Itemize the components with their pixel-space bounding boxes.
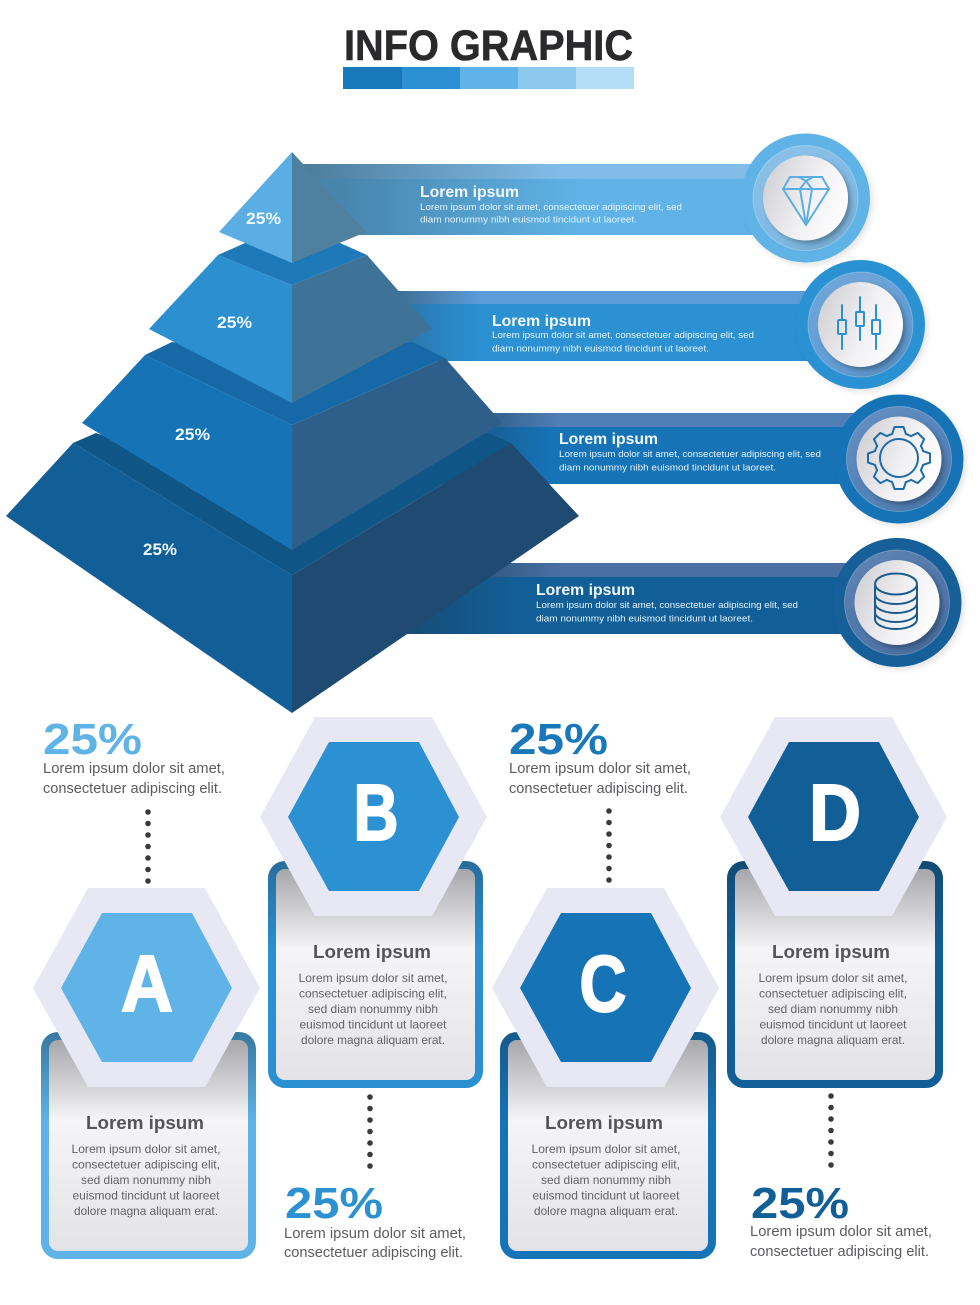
ribbon 2 text: Lorem ipsum dolor sit amet, consectetuer adipiscing elit, sed [492, 330, 754, 341]
dotted connector C [606, 808, 612, 883]
pyramid [6, 152, 579, 713]
icon: coin stack [875, 574, 917, 629]
stat A: consectetuer adipiscing elit. [43, 781, 222, 797]
stat C [509, 715, 691, 797]
ribbon 2 heading: Lorem ipsum [492, 313, 591, 330]
stat D: 25% [751, 1179, 849, 1228]
card D heading: Lorem ipsum [772, 941, 890, 962]
ribbon 4 text: diam nonummy nibh euismod tincidunt ut laoreet. [536, 614, 753, 624]
card B text: consectetuer adipiscing elit, [299, 986, 447, 1000]
card C text: Lorem ipsum dolor sit amet, [532, 1142, 680, 1156]
dotted connector D [828, 1093, 834, 1168]
card C heading: Lorem ipsum [545, 1112, 663, 1133]
card D text: sed diam nonummy nibh [768, 1002, 898, 1016]
icon badge: diamond [741, 134, 870, 262]
stat B [284, 1179, 466, 1261]
card B text [298, 971, 448, 1047]
ribbon 3 text [559, 449, 821, 474]
card B text: Lorem ipsum dolor sit amet, [298, 971, 448, 985]
ribbon 3 text: Lorem ipsum dolor sit amet, consectetuer adipiscing elit, sed [559, 449, 821, 460]
card D text: consectetuer adipiscing elit, [759, 986, 907, 1000]
card B heading: Lorem ipsum [313, 941, 431, 962]
ribbon 3 text: diam nonummy nibh euismod tincidunt ut laoreet. [559, 462, 776, 474]
ribbon 4 text [536, 600, 798, 624]
hexagon A: A [121, 939, 173, 1028]
card D [727, 861, 943, 1088]
stat B: consectetuer adipiscing elit. [284, 1245, 463, 1261]
ribbon 2 text [492, 330, 754, 354]
stat D: consectetuer adipiscing elit. [750, 1244, 929, 1260]
ribbon 4 heading: Lorem ipsum [536, 582, 635, 599]
card B text: dolore magna aliquam erat. [301, 1033, 445, 1047]
hexagon B: B [354, 768, 398, 857]
card A text: consectetuer adipiscing elit, [72, 1158, 220, 1172]
card D text: euismod tincidunt ut laoreet [760, 1018, 907, 1032]
card A text: sed diam nonummy nibh [81, 1173, 211, 1187]
card D text: dolore magna aliquam erat. [761, 1033, 905, 1047]
hexagon A [33, 888, 260, 1087]
card A [41, 1032, 256, 1259]
stat B: 25% [285, 1179, 383, 1228]
ribbon 3 [440, 413, 870, 484]
card C text [532, 1142, 680, 1218]
card C text: consectetuer adipiscing elit, [532, 1158, 680, 1172]
card B [268, 861, 483, 1088]
card A text: Lorem ipsum dolor sit amet, [72, 1142, 220, 1156]
ribbon 1 [295, 164, 770, 235]
hexagon D: D [809, 768, 861, 857]
stat C: 25% [509, 715, 608, 764]
stat D: Lorem ipsum dolor sit amet, [750, 1224, 932, 1240]
card A text: dolore magna aliquam erat. [74, 1204, 218, 1218]
icon: gear [868, 427, 930, 489]
ribbon 1 text: diam nonummy nibh euismod tincidunt ut laoreet. [420, 214, 637, 226]
tier 4 base: 25% [143, 541, 177, 559]
ribbon 1 text [420, 202, 682, 226]
card C text: sed diam nonummy nibh [541, 1173, 671, 1187]
tier 4 base [6, 433, 579, 713]
ribbon 1 text: Lorem ipsum dolor sit amet, consectetuer adipiscing elit, sed [420, 202, 682, 213]
card A text: euismod tincidunt ut laoreet [72, 1188, 220, 1202]
stat C: consectetuer adipiscing elit. [509, 781, 688, 797]
tier 3: 25% [175, 426, 210, 444]
tier 1 top: 25% [246, 210, 281, 228]
ribbon 2 text: diam nonummy nibh euismod tincidunt ut laoreet. [492, 344, 709, 354]
icon badge: gear [834, 394, 964, 524]
card C text: euismod tincidunt ut laoreet [532, 1188, 680, 1202]
stat A: 25% [43, 715, 142, 764]
stat C: Lorem ipsum dolor sit amet, [509, 761, 691, 777]
icon badge: coins [832, 538, 962, 667]
hexagon D [720, 717, 947, 916]
card A text [72, 1142, 220, 1218]
ribbon 4 text: Lorem ipsum dolor sit amet, consectetuer adipiscing elit, sed [536, 600, 798, 611]
card D text: Lorem ipsum dolor sit amet, [758, 971, 908, 985]
stat D [750, 1179, 932, 1260]
ribbon 1 heading: Lorem ipsum [420, 184, 519, 201]
tier 1 top [219, 152, 366, 263]
tier 3 [82, 342, 502, 550]
card C [500, 1032, 716, 1259]
card B text: euismod tincidunt ut laoreet [300, 1018, 447, 1032]
tier 2 [149, 235, 432, 403]
title: INFO GRAPHIC [344, 22, 633, 70]
title colour bar [343, 67, 634, 89]
card D text [758, 971, 908, 1047]
hexagon B [260, 717, 487, 916]
card B text: sed diam nonummy nibh [308, 1002, 438, 1016]
dotted connector B [367, 1094, 373, 1169]
stat A [43, 715, 225, 797]
icon: diamond [783, 177, 829, 225]
hexagon C [492, 888, 719, 1087]
icon: sliders [838, 297, 880, 349]
icon badge: sliders [796, 260, 925, 389]
dotted connector A [145, 809, 151, 884]
ribbon 4 [400, 563, 870, 634]
tier 2: 25% [217, 314, 252, 332]
stat B: Lorem ipsum dolor sit amet, [284, 1226, 466, 1242]
card A heading: Lorem ipsum [86, 1112, 204, 1133]
hexagon C: C [580, 939, 626, 1028]
ribbon 3 heading: Lorem ipsum [559, 431, 658, 448]
ribbon 2 [370, 291, 830, 361]
stat A: Lorem ipsum dolor sit amet, [43, 761, 225, 777]
card C text: dolore magna aliquam erat. [534, 1204, 678, 1218]
